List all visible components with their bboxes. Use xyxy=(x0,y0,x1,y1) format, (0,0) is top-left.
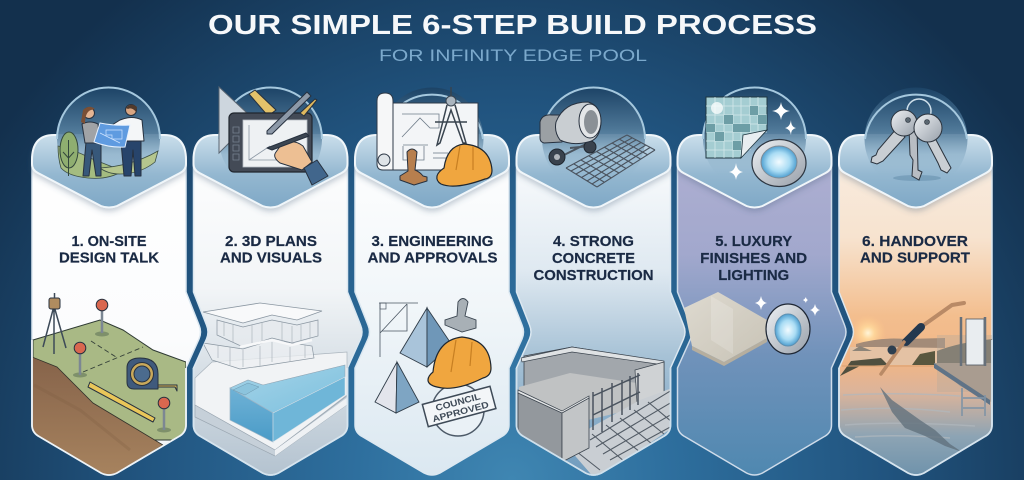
approved stamp: COUNCIL xyxy=(434,391,482,413)
step label xyxy=(220,233,322,266)
icon: client and designer with plan xyxy=(58,104,158,178)
icon: keys on ring xyxy=(871,99,951,181)
panel: step 6 handover and support xyxy=(839,88,993,475)
panel: step 1 on-site design talk xyxy=(32,88,200,480)
step label: DESIGN TALK xyxy=(59,250,159,266)
panel: step 4 strong concrete construction xyxy=(516,88,685,480)
panel outline xyxy=(839,340,992,475)
step label: 2. 3D PLANS xyxy=(225,233,317,250)
panel body xyxy=(678,135,846,475)
panel: step 3 engineering and approvals xyxy=(355,87,524,475)
panel: step 5 luxury finishes and lighting xyxy=(678,88,846,475)
dome rim xyxy=(542,88,645,139)
panel outline xyxy=(32,340,186,475)
step label: FINISHES AND xyxy=(700,250,807,267)
diver reflection xyxy=(880,387,962,452)
header dome xyxy=(703,88,806,190)
title: OUR SIMPLE 6-STEP BUILD PROCESS xyxy=(208,9,817,40)
step label xyxy=(860,233,970,266)
step label: AND VISUALS xyxy=(220,250,322,266)
header dome xyxy=(219,88,322,190)
icon: cement mixer and rebar mesh xyxy=(540,102,655,187)
dome rim xyxy=(703,88,806,139)
panel header xyxy=(839,135,992,208)
step label: 5. LUXURY xyxy=(715,233,792,250)
icon: blueprint, compass, stamp and hard hat xyxy=(377,87,492,186)
panel: step 2 3d plans and visuals xyxy=(194,87,362,475)
approved stamp xyxy=(422,384,496,436)
panel body xyxy=(355,135,524,475)
panel header xyxy=(355,135,509,208)
step label: CONSTRUCTION xyxy=(534,267,654,284)
step label xyxy=(368,233,498,266)
step label xyxy=(534,233,654,284)
header dome xyxy=(864,88,968,190)
step label: 3. ENGINEERING xyxy=(372,233,494,250)
panel header xyxy=(194,135,348,208)
panel outline xyxy=(194,368,348,475)
step label: LIGHTING xyxy=(718,267,789,284)
dome rim xyxy=(57,88,160,139)
hard hat xyxy=(428,337,491,388)
illustration: house and pool xyxy=(195,303,348,456)
icon: mosaic tile and pool light xyxy=(706,97,806,186)
dome rim xyxy=(865,95,967,139)
panel body xyxy=(194,135,362,475)
panel header xyxy=(516,135,670,208)
illustration: marble slab and light xyxy=(684,292,820,366)
header dome xyxy=(57,88,160,190)
panel body xyxy=(839,135,992,475)
dome rim xyxy=(381,95,483,139)
icon: drawing tablet and tools xyxy=(219,87,328,185)
illustration: infinity pool sunset with diver xyxy=(840,303,993,452)
dome rim xyxy=(219,88,322,139)
subtitle: FOR INFINITY EDGE POOL xyxy=(379,46,647,65)
illustration: engineering shapes xyxy=(375,298,496,436)
panel body xyxy=(516,135,685,475)
approved stamp: APPROVED xyxy=(431,399,490,424)
step label: 1. ON-SITE xyxy=(72,233,146,250)
step label: CONCRETE xyxy=(552,250,635,267)
illustration: concrete pit with rebar xyxy=(518,347,672,480)
panel body xyxy=(32,135,200,475)
step label: 4. STRONG xyxy=(553,233,634,250)
panel outline xyxy=(516,368,670,475)
panel header xyxy=(32,135,186,208)
diver xyxy=(881,303,964,374)
illustration: surveyed site xyxy=(32,293,186,480)
panel header xyxy=(678,135,832,208)
header dome xyxy=(542,88,645,190)
step label: AND APPROVALS xyxy=(368,250,498,266)
step label xyxy=(700,233,807,284)
step label: 6. HANDOVER xyxy=(862,233,968,250)
step label: AND SUPPORT xyxy=(860,250,970,266)
header dome xyxy=(380,88,484,190)
step label xyxy=(59,233,159,266)
